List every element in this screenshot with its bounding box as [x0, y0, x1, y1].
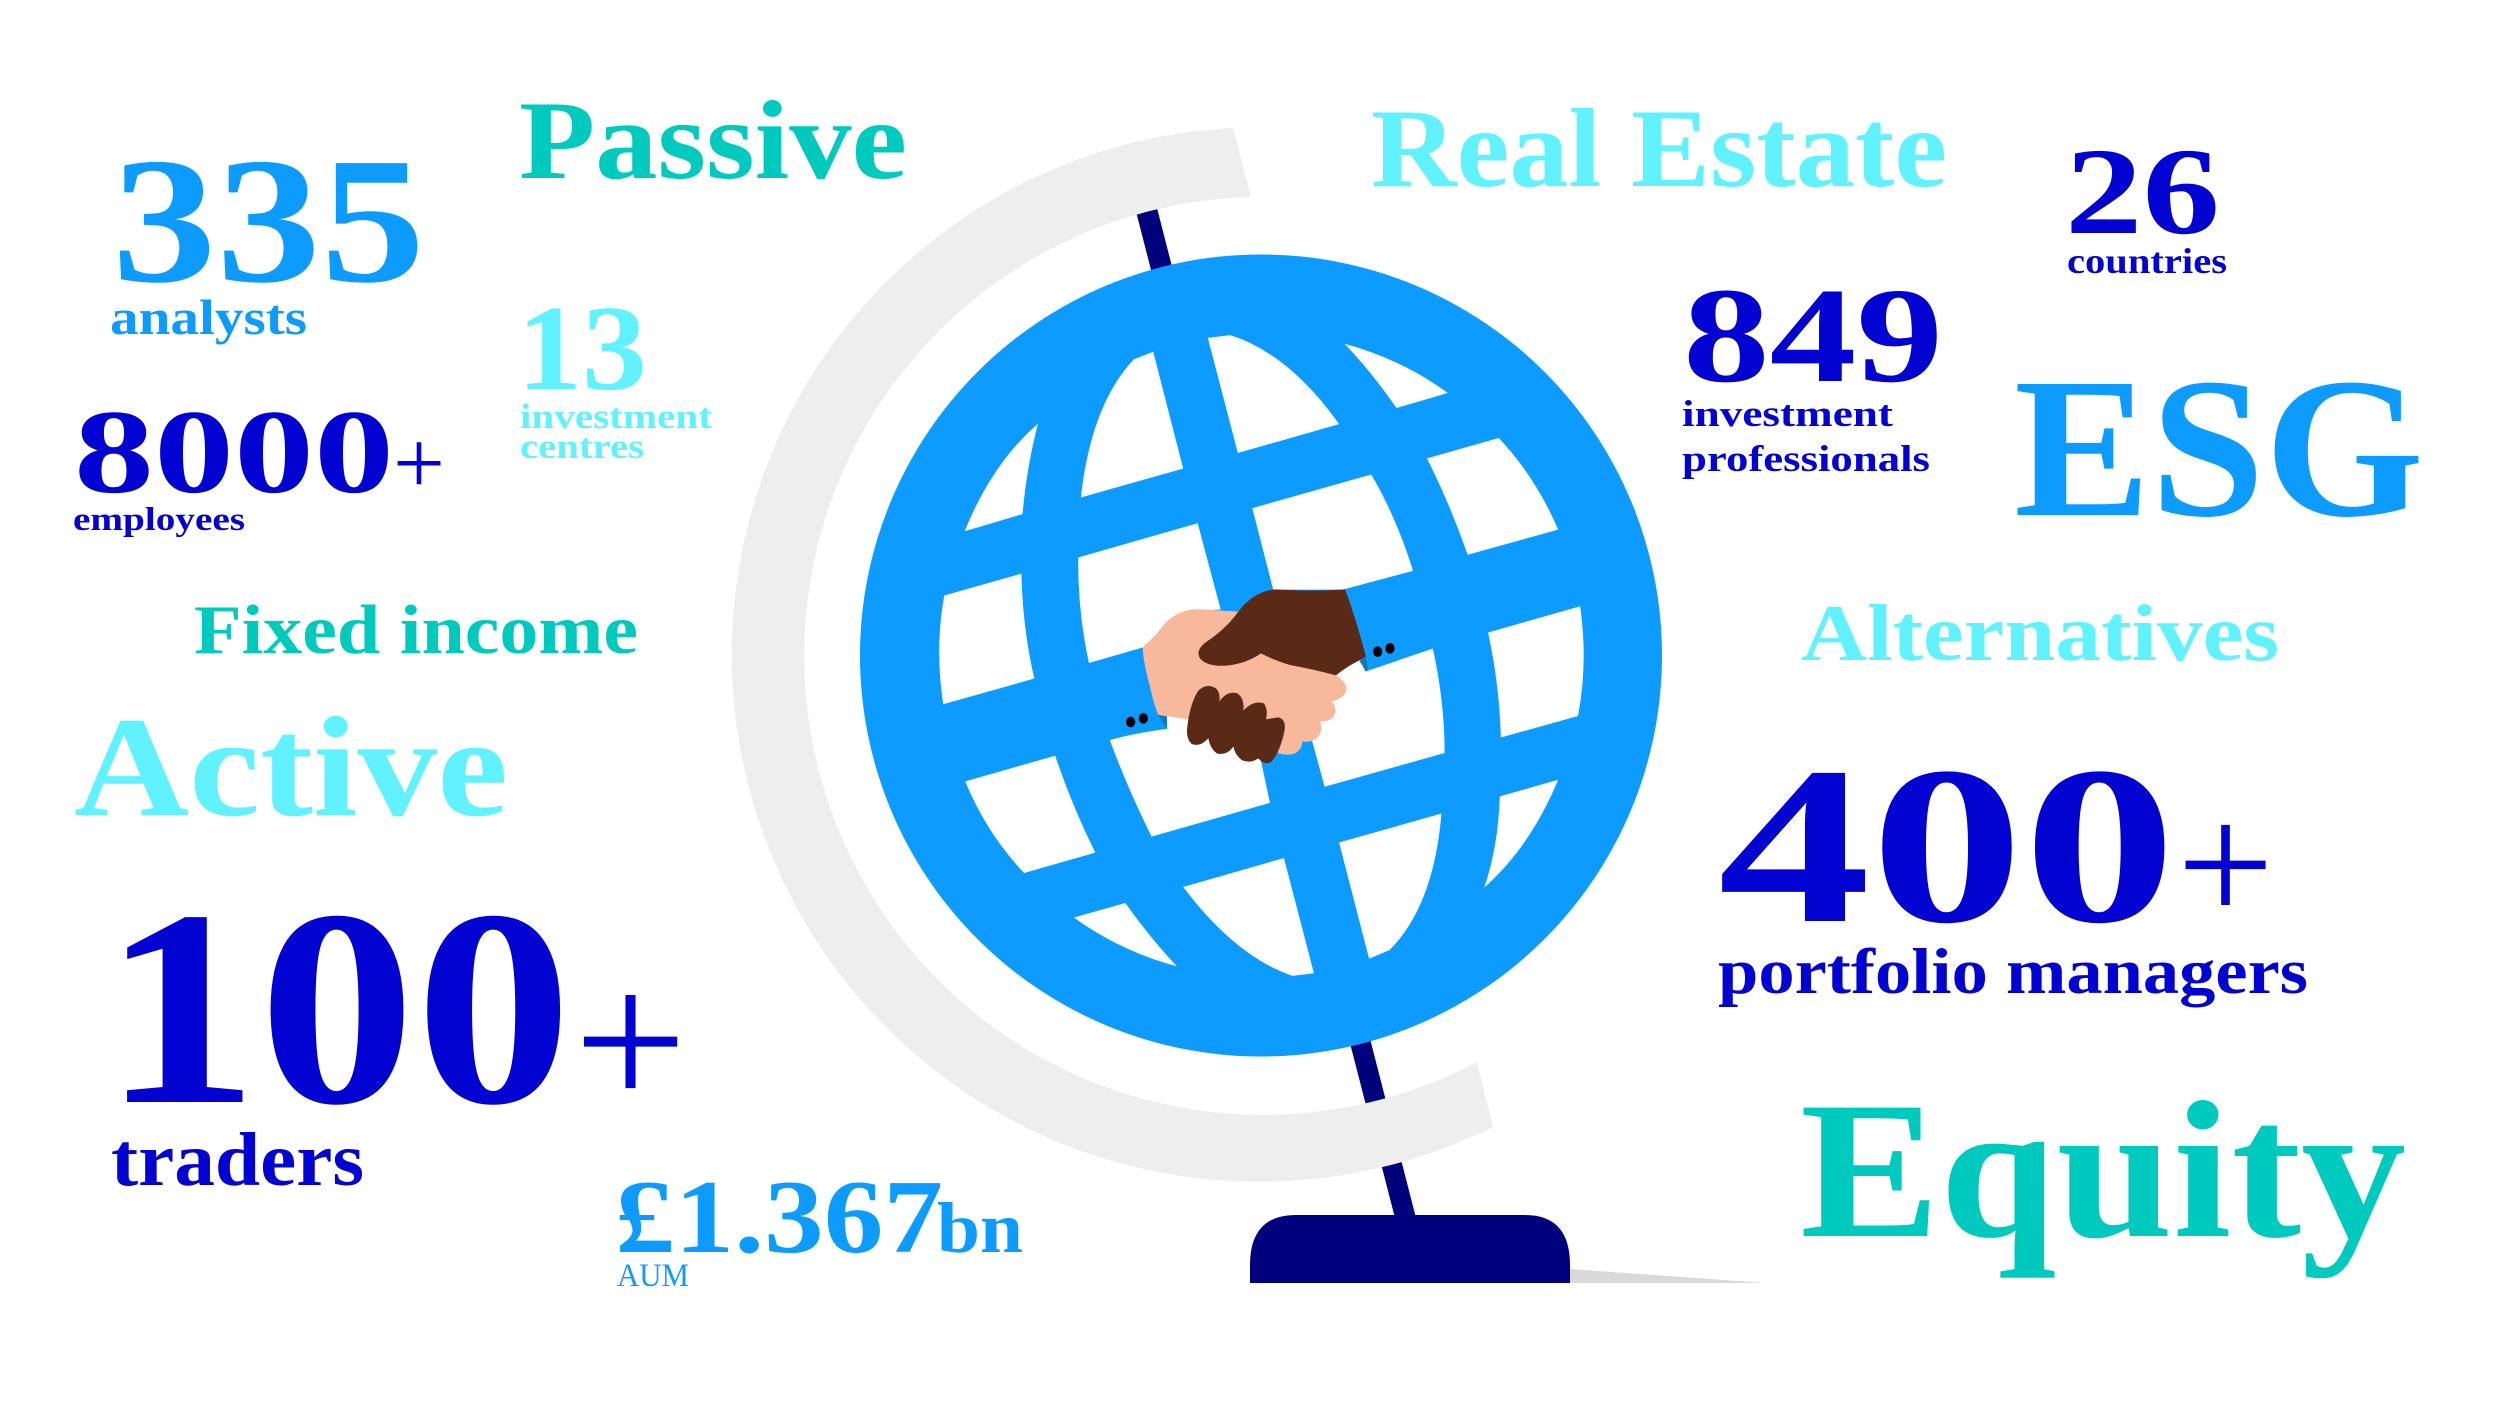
stat: 849 investment professionals: 849: [1683, 261, 1943, 411]
right cuff buttons: [1373, 643, 1395, 657]
stat: 8000+ employees: 8000: [74, 385, 394, 518]
stat: 13 investment centres: [517, 281, 712, 466]
left cuff fold: [1158, 715, 1167, 729]
stat: 335 analysts: analysts: [110, 289, 307, 345]
stat: 400+ portfolio managers: +: [2177, 770, 2274, 960]
right cuff fold: [1359, 657, 1368, 671]
globe sphere: [860, 254, 1662, 1056]
stat: 8000+ employees: employees: [73, 502, 245, 538]
stat: 13 investment centres: centres: [520, 427, 644, 466]
stat: 400+ portfolio managers: portfolio managers: [1718, 936, 2308, 1008]
label: Equity: Equity: [1800, 1062, 2406, 1279]
stat: 400+ portfolio managers: [1718, 720, 2308, 1008]
stat: 849 investment professionals: professionals: [1682, 439, 1930, 480]
globe meridian arc: [732, 128, 1493, 1182]
light hand: [1143, 609, 1346, 755]
icon: handshake: [1126, 589, 1395, 763]
label: Real Estate: Real Estate: [1371, 87, 1947, 211]
stat: £1.367bn AUM: AUM: [617, 1258, 689, 1294]
stat: 8000+ employees: +: [393, 414, 445, 513]
stat: £1.367bn AUM: bn: [937, 1188, 1023, 1268]
stat: 100+ traders: 100: [102, 852, 572, 1163]
stat: 400+ portfolio managers: 400: [1718, 720, 2176, 970]
stat: 100+ traders: [102, 852, 687, 1202]
label: Passive: Passive: [519, 79, 907, 203]
stat: 335 analysts: 335: [112, 121, 425, 320]
globe grid panes: [939, 335, 1584, 976]
dark hand fingers: [1187, 686, 1285, 763]
stat: 100+ traders: +: [574, 931, 687, 1152]
stat: 849 investment professionals: investment: [1682, 394, 1894, 435]
globe stand base: [1250, 1215, 1570, 1283]
stat: 26 countries: 26: [2065, 123, 2220, 260]
stat: 13 investment centres: investment: [520, 397, 712, 436]
dark hand: [1198, 589, 1366, 675]
label: Active: Active: [74, 688, 508, 846]
left cuff buttons: [1126, 713, 1148, 727]
stat: 26 countries: countries: [2067, 241, 2227, 281]
stat: £1.367bn AUM: [615, 1158, 1023, 1294]
globe shadow: [1570, 1269, 1766, 1283]
stat: 100+ traders: traders: [111, 1118, 364, 1202]
stat: £1.367bn AUM: £1.367: [615, 1158, 943, 1275]
label: Fixed income: Fixed income: [194, 592, 638, 669]
label: ESG: ESG: [2014, 338, 2424, 559]
globe axis pole: [1136, 208, 1416, 1218]
label: Alternatives: Alternatives: [1801, 590, 2279, 678]
stat: 849 investment professionals: [1682, 261, 1943, 480]
globe illustration: [732, 128, 1766, 1283]
stat: 13 investment centres: 13: [517, 281, 647, 416]
stat: 26 countries: [2065, 123, 2227, 281]
stat: 8000+ employees: [73, 385, 445, 538]
